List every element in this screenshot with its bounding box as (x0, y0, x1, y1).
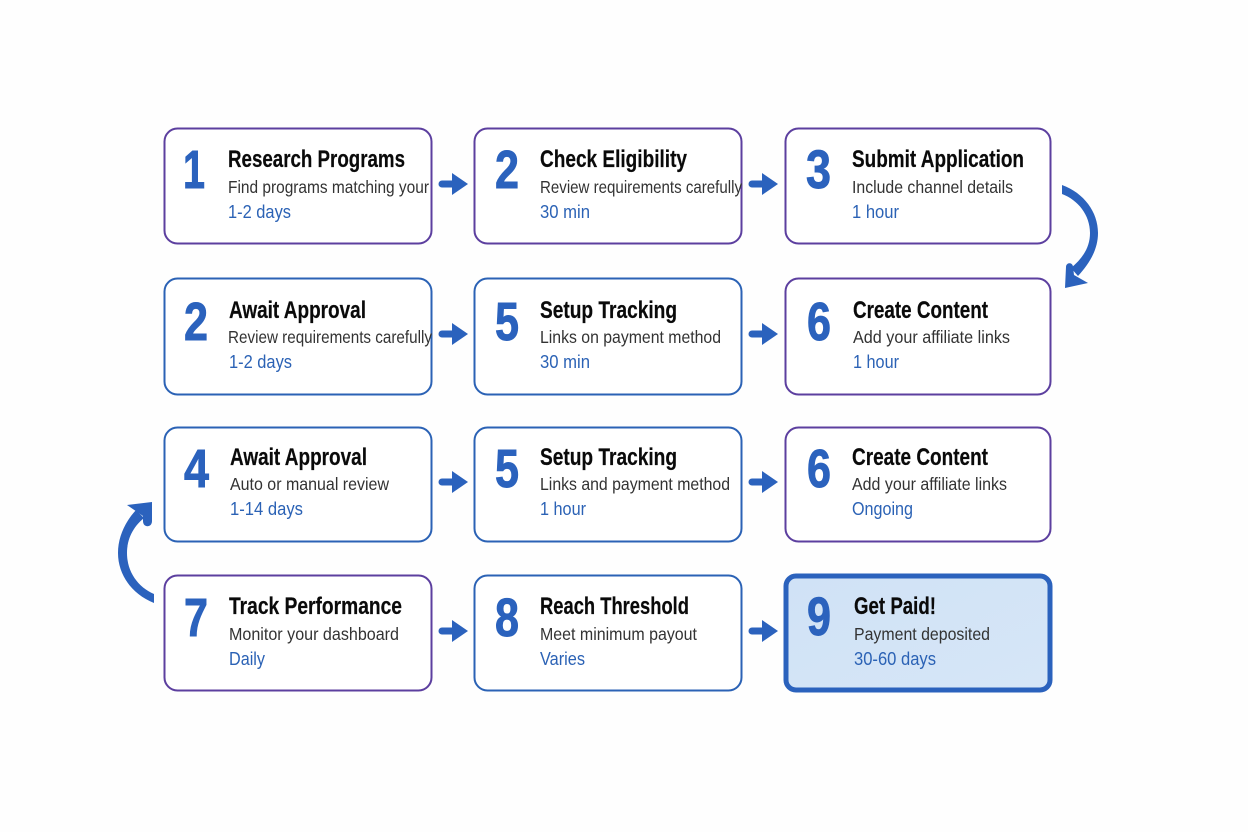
card 4: Await Approval (row 2): 1-2 days (229, 352, 292, 372)
arrow: step 1 to 2 (442, 173, 468, 195)
card 8: Setup Tracking (row 3): Setup Tracking (540, 444, 677, 471)
card 2: Check Eligibility: 2 (495, 140, 519, 200)
card 3: Submit Application: Submit Application (852, 146, 1024, 173)
card 9: Create Content (row 3) (786, 428, 1050, 542)
card 11: Reach Threshold: Reach Threshold (540, 593, 689, 620)
card 6: Create Content (row 2): Add your affiliate links (853, 327, 1010, 347)
card 10: Track Performance: Track Performance (229, 593, 402, 620)
card 3: Submit Application (786, 128, 1050, 244)
card 5: Setup Tracking (row 2): 30 min (540, 352, 590, 372)
card 2: Check Eligibility: 30 min (540, 202, 590, 222)
card 3: Submit Application: 3 (806, 140, 831, 200)
card 7: Await Approval (row 3): 1-14 days (230, 499, 303, 519)
card 11: Reach Threshold: Varies (540, 649, 585, 669)
arrow: curved, row 1 to row 2 (1062, 185, 1098, 288)
card 12: Get Paid (highlighted): 9 (807, 587, 831, 647)
card 5: Setup Tracking (row 2): Links on payment method (540, 327, 721, 347)
card 1: Research Programs: Find programs matching your (228, 177, 429, 197)
card 4: Await Approval (row 2) (164, 278, 432, 394)
card 12: Get Paid (highlighted): Get Paid! (854, 593, 936, 620)
card 12: Get Paid (highlighted): 30-60 days (854, 649, 936, 669)
card 6: Create Content (row 2) (786, 278, 1050, 394)
arrow: row 3, step 1 to 2 (442, 471, 468, 493)
card 9: Create Content (row 3): 6 (807, 439, 831, 499)
arrow: row 2, step 2 to 3 (752, 323, 778, 345)
card 5: Setup Tracking (row 2): 5 (495, 292, 519, 352)
card 11: Reach Threshold (474, 576, 742, 690)
card 1: Research Programs (164, 128, 432, 244)
arrow: step 2 to 3 (752, 173, 778, 195)
card 8: Setup Tracking (row 3): Links and payment method (540, 474, 730, 494)
card 7: Await Approval (row 3): Auto or manual review (230, 474, 389, 494)
card 1: Research Programs: 1 (183, 140, 205, 200)
card 8: Setup Tracking (row 3): 1 hour (540, 499, 586, 519)
card 3: Submit Application: Include channel details (852, 177, 1013, 197)
card 12: Get Paid (highlighted) (786, 576, 1050, 690)
card 9: Create Content (row 3): Ongoing (852, 499, 913, 519)
card 1: Research Programs: Research Programs (228, 146, 405, 173)
arrow: curved, row 4 back up to row 3 (118, 502, 154, 603)
card 4: Await Approval (row 2): 2 (184, 292, 208, 352)
card 4: Await Approval (row 2): Await Approval (229, 297, 366, 324)
card 2: Check Eligibility (474, 128, 742, 244)
card 2: Check Eligibility: Check Eligibility (540, 146, 688, 173)
arrow: row 4, step 1 to 2 (442, 620, 468, 642)
card 7: Await Approval (row 3): 4 (184, 439, 209, 499)
card 6: Create Content (row 2): 6 (807, 292, 831, 352)
arrow: row 3, step 2 to 3 (752, 471, 778, 493)
card 2: Check Eligibility: Review requirements carefully (540, 177, 742, 197)
card 9: Create Content (row 3): Create Content (852, 444, 988, 471)
card 10: Track Performance: Monitor your dashboard (229, 624, 399, 644)
card 5: Setup Tracking (row 2) (474, 278, 742, 394)
card 5: Setup Tracking (row 2): Setup Tracking (540, 297, 677, 324)
arrow: row 2, step 1 to 2 (442, 323, 468, 345)
card 10: Track Performance (164, 576, 432, 690)
card 9: Create Content (row 3): Add your affiliate links (852, 474, 1007, 494)
card 7: Await Approval (row 3) (164, 428, 432, 542)
card 3: Submit Application: 1 hour (852, 202, 899, 222)
card 6: Create Content (row 2): 1 hour (853, 352, 899, 372)
card 4: Await Approval (row 2): Review requirements carefully (228, 327, 432, 347)
card 10: Track Performance: 7 (184, 588, 208, 648)
card 11: Reach Threshold: 8 (495, 588, 519, 648)
card 12: Get Paid (highlighted): Payment deposited (854, 624, 990, 644)
card 8: Setup Tracking (row 3): 5 (495, 439, 519, 499)
card 8: Setup Tracking (row 3) (474, 428, 742, 542)
card 6: Create Content (row 2): Create Content (853, 297, 988, 324)
card 11: Reach Threshold: Meet minimum payout (540, 624, 697, 644)
card 1: Research Programs: 1-2 days (228, 202, 291, 222)
card 7: Await Approval (row 3): Await Approval (230, 444, 367, 471)
arrow: row 4, step 2 to 3 (752, 620, 778, 642)
card 10: Track Performance: Daily (229, 649, 265, 669)
